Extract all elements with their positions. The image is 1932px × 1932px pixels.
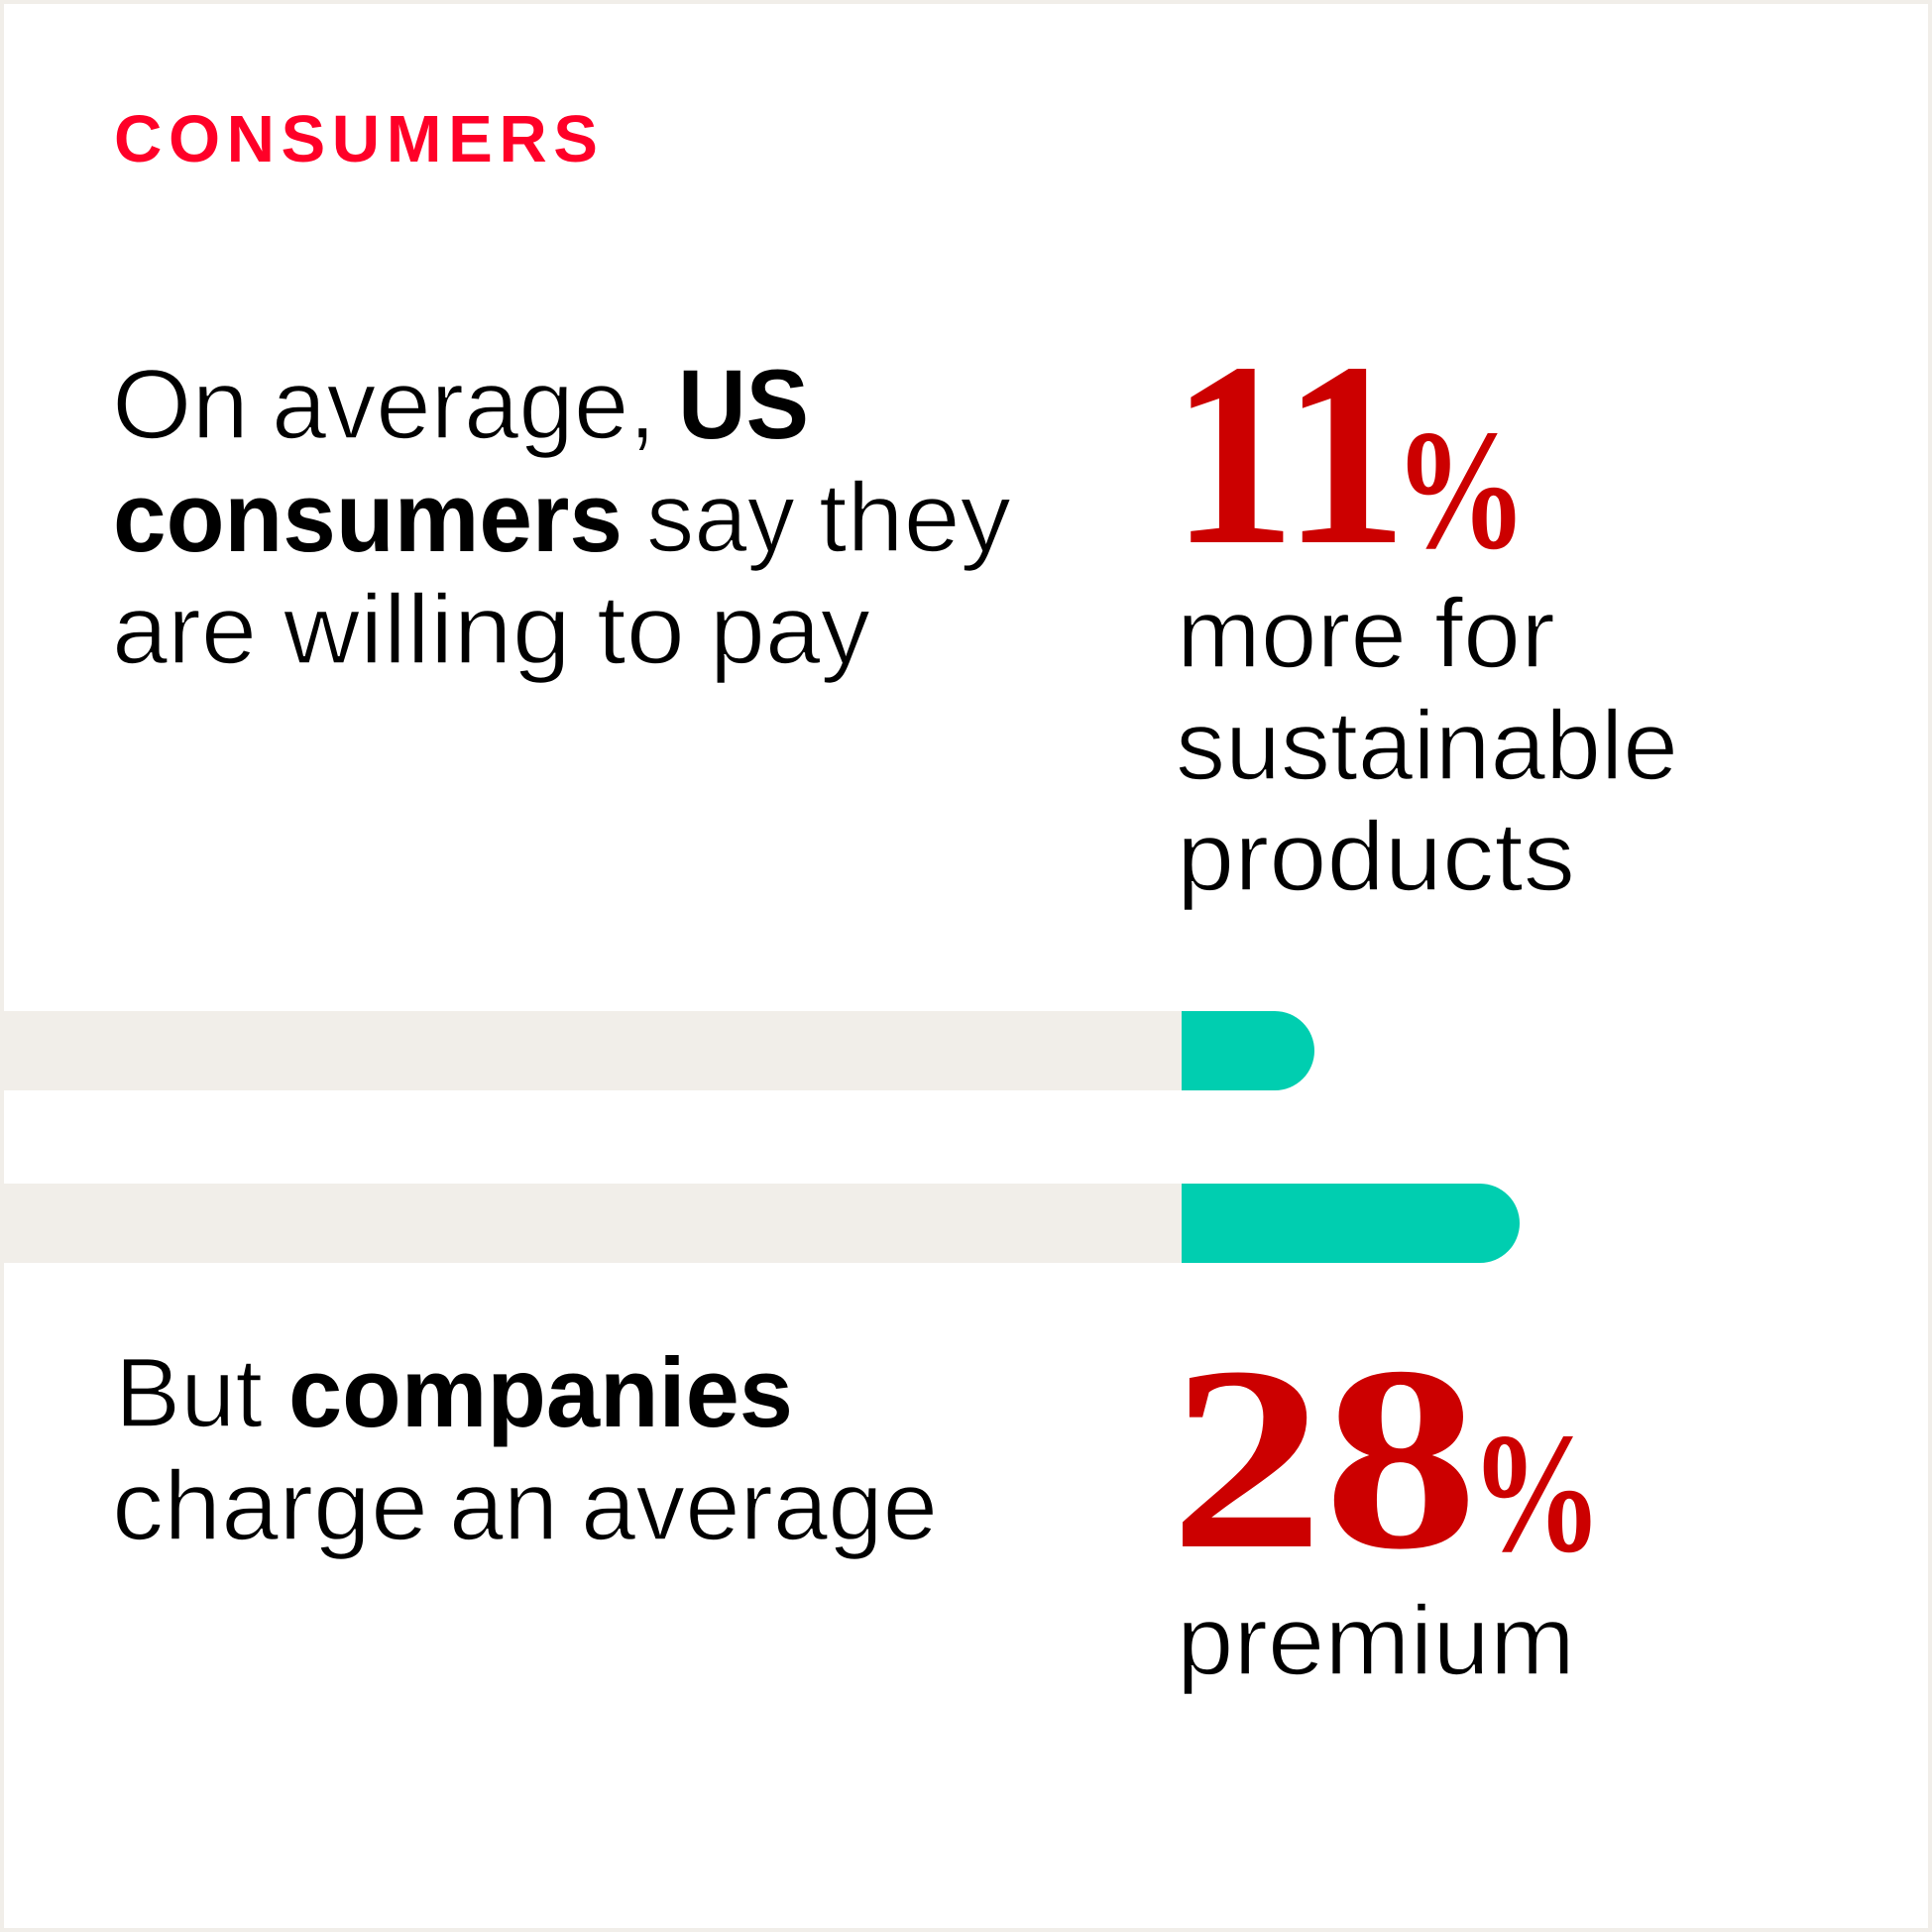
- text block: willingness to pay: say: [646, 462, 795, 572]
- text block: willingness to pay: are: [112, 574, 257, 684]
- text block: more for sustainable products: products: [1177, 801, 1575, 911]
- text block: willingness to pay: they: [819, 462, 1012, 572]
- stat: 28 percent: %: [1470, 1399, 1603, 1588]
- text block: more for sustainable products: [1176, 578, 1678, 911]
- text block: willingness to pay: [112, 349, 1012, 684]
- stat: 11 percent: %: [1394, 396, 1528, 585]
- text block: willingness to pay: to: [597, 574, 685, 684]
- text block: willingness to pay: pay: [710, 574, 871, 684]
- text block: premium: premium: [1177, 1585, 1575, 1695]
- text block: companies charge: an: [449, 1450, 558, 1560]
- text block: companies charge: But: [115, 1337, 263, 1447]
- text block: willingness to pay: On: [112, 349, 249, 459]
- stat: 28 percent: [1170, 1313, 1603, 1604]
- heading: consumers: CONSUMERS: [114, 102, 598, 176]
- text block: companies charge: average: [581, 1450, 938, 1560]
- text block: willingness to pay: willing: [283, 574, 571, 684]
- text block: more for sustainable products: more: [1177, 578, 1407, 688]
- text block: more for sustainable products: sustainable: [1176, 690, 1678, 800]
- text block: companies charge: [112, 1337, 938, 1560]
- stat: 11 percent: 11: [1171, 309, 1408, 600]
- text block: willingness to pay: US: [678, 349, 809, 459]
- text block: more for sustainable products: for: [1434, 578, 1555, 688]
- text block: willingness to pay: average,: [272, 349, 656, 459]
- stat: 11 percent: [1171, 309, 1528, 600]
- stat: 28 percent: 28: [1170, 1313, 1478, 1604]
- text block: companies charge: charge: [112, 1450, 428, 1560]
- bar chart: 11 percent bar: [4, 1011, 1314, 1090]
- bar chart: 28 percent bar: [4, 1184, 1520, 1263]
- text block: companies charge: companies: [288, 1337, 793, 1447]
- text block: willingness to pay: consumers: [113, 462, 623, 572]
